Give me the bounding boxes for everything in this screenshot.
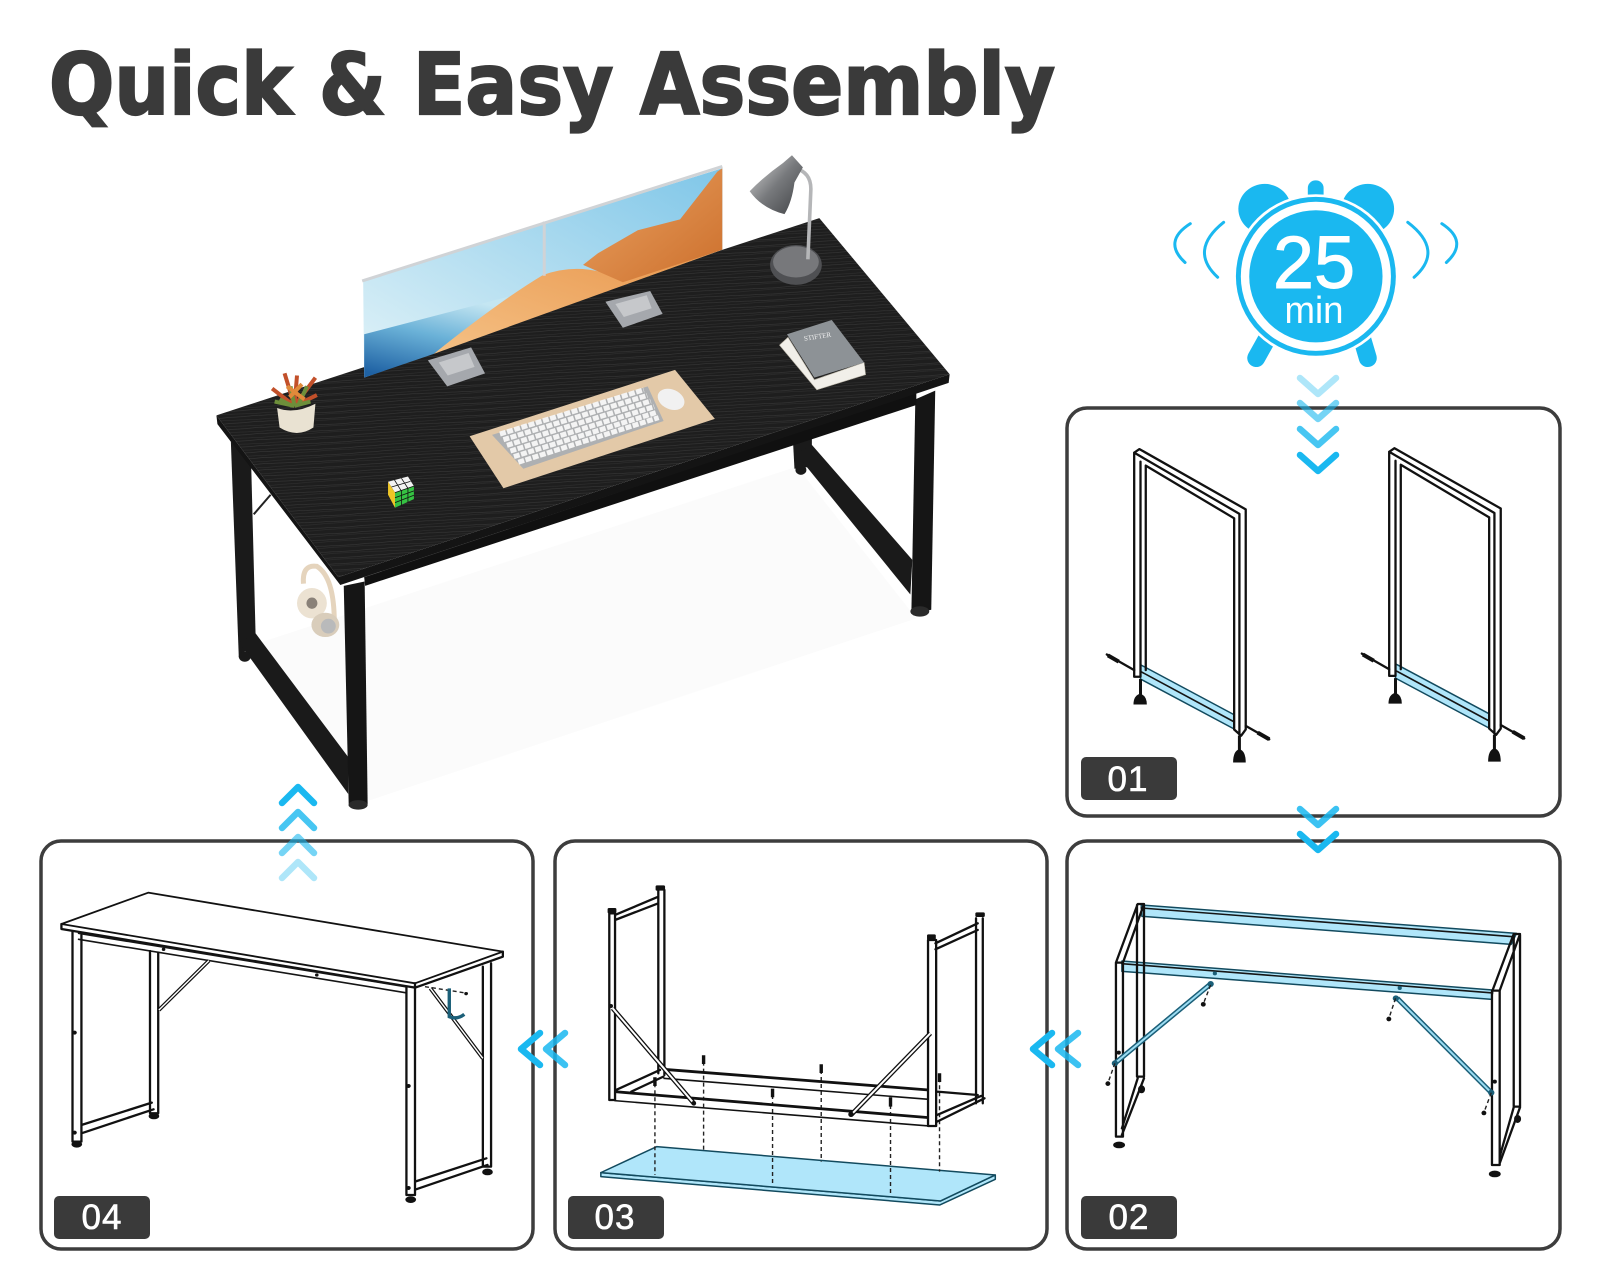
clock number: 25 — [1273, 221, 1355, 304]
blue diagonal braces — [1112, 981, 1494, 1096]
potted plant — [272, 373, 317, 433]
desk rear-right leg and rail — [793, 434, 912, 595]
alarm clock icon: 25 min — [1175, 180, 1457, 358]
product photo: black desk with accessories — [216, 155, 950, 810]
desk lamp — [750, 155, 822, 285]
keyboard — [492, 386, 664, 469]
headphones on hook — [297, 566, 339, 637]
upside-down frame and tabletop — [601, 885, 995, 1205]
desk side brace — [254, 495, 271, 514]
step badge 03 — [568, 1196, 664, 1239]
long beams — [614, 1069, 929, 1126]
panel outline 04 — [41, 841, 533, 1249]
right leg frame — [1362, 448, 1524, 762]
title: Quick & Easy Assembly — [49, 36, 1055, 135]
blue crossbeams — [1122, 905, 1517, 999]
monitor screen sky — [363, 168, 722, 378]
blue tabletop — [601, 1147, 995, 1205]
left leg frame — [1107, 449, 1269, 763]
arrow: step 04 to finished desk — [282, 787, 314, 878]
panel: step 02 — [1067, 841, 1560, 1249]
right leg frame — [405, 963, 493, 1203]
right leg frame — [927, 912, 985, 1126]
tabletop — [61, 893, 503, 988]
panel: step 01 — [1067, 408, 1560, 816]
book stack: STIFTER — [803, 331, 832, 343]
dashed screw guides — [655, 1055, 940, 1195]
right leg frame — [1489, 934, 1521, 1177]
floor shadow — [255, 467, 916, 801]
desk apron — [364, 393, 916, 586]
monitor stand right — [605, 291, 663, 328]
clock body — [1233, 194, 1399, 358]
arrow: step 03 to step 04 — [521, 1033, 565, 1065]
monitor far dune — [583, 168, 722, 282]
hook install detail — [162, 948, 468, 1018]
arrow: step 01 to step 02 — [1300, 809, 1336, 850]
step badge 04 — [54, 1196, 150, 1239]
panel outline 03 — [555, 841, 1047, 1249]
left leg frame — [608, 885, 665, 1100]
assembled desk line art — [61, 893, 503, 1203]
step badge 02 — [1081, 1196, 1177, 1239]
leg frames line art — [1107, 448, 1524, 763]
step badge 03: 03 — [595, 1198, 635, 1237]
desk rear-left leg and rail — [231, 441, 348, 794]
screws — [1105, 971, 1491, 1115]
monitor bezel — [362, 166, 722, 281]
arrow: step 02 to step 03 — [1033, 1033, 1078, 1065]
step badge 02: 02 — [1109, 1198, 1149, 1237]
monitor near dune — [434, 250, 722, 354]
desk front-left leg — [344, 582, 368, 810]
arrow: clock to step 01 — [1300, 378, 1336, 471]
diagonal braces — [609, 1004, 930, 1117]
frame with crossbeams line art — [1105, 904, 1521, 1177]
clock feet — [1256, 337, 1368, 358]
desk mat — [470, 370, 715, 488]
sound waves — [1175, 222, 1457, 277]
step badge 01 — [1081, 757, 1177, 800]
step badge 04: 04 — [82, 1198, 122, 1237]
clock unit: min — [1284, 290, 1344, 332]
apron — [79, 933, 405, 993]
monitor stand left — [428, 347, 485, 386]
mouse — [653, 384, 689, 414]
rubik's cube — [388, 477, 414, 508]
step badge 01: 01 — [1108, 760, 1148, 799]
left leg frame — [71, 932, 159, 1148]
panel: step 04 — [41, 841, 533, 1249]
desk top edge — [216, 374, 950, 585]
left leg frame — [1113, 904, 1145, 1148]
diagonal braces — [159, 961, 483, 1058]
book stack — [780, 320, 866, 390]
panel outline 01 — [1067, 408, 1560, 816]
desk top surface — [216, 218, 950, 577]
panel: step 03 — [555, 841, 1047, 1249]
monitor screen sea — [364, 297, 508, 378]
panel outline 02 — [1067, 841, 1560, 1249]
desk front-right leg — [910, 391, 935, 617]
clock bells and knob — [1238, 180, 1394, 234]
